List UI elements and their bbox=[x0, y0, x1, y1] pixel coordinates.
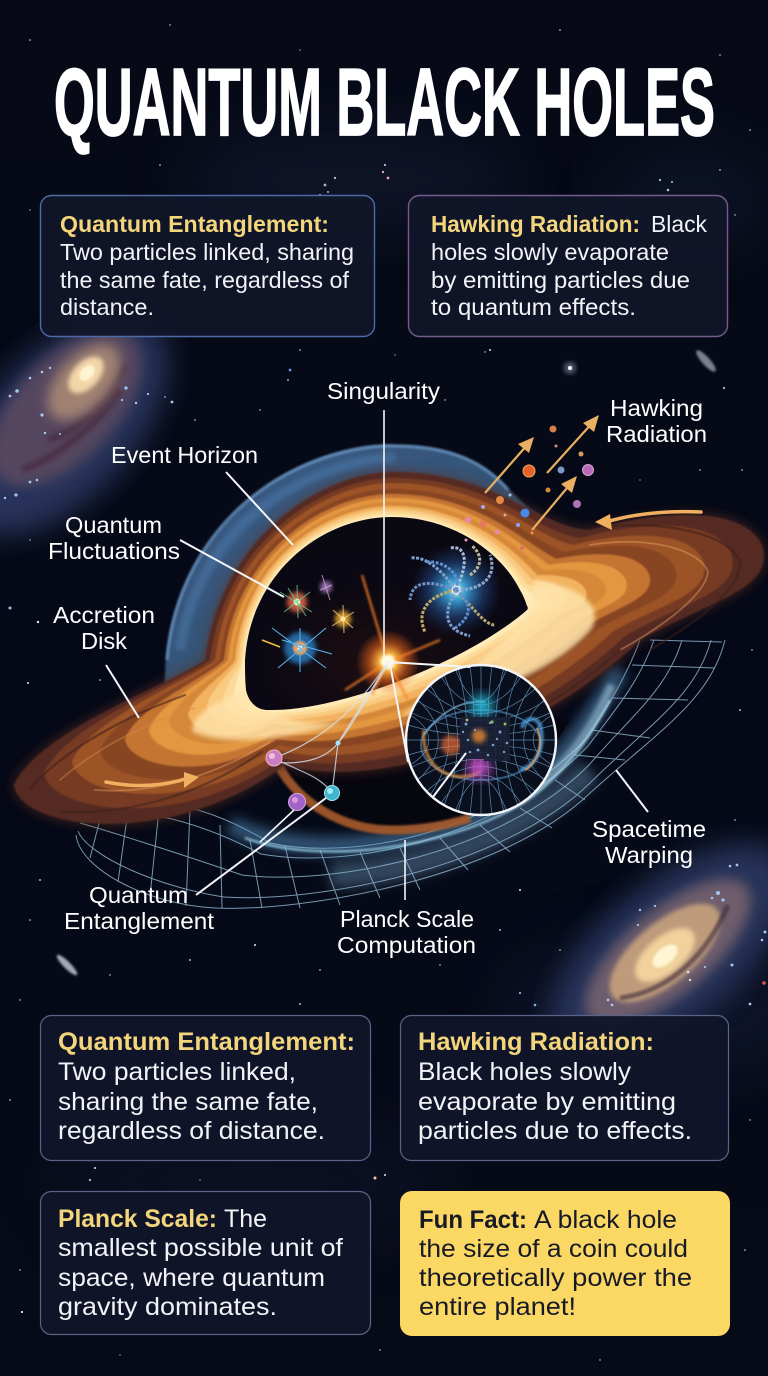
panel: Fun Fact: the size of a coin could bbox=[419, 1235, 688, 1263]
panel: Planck Scale bbox=[40, 1192, 370, 1334]
spiral inside the hole bbox=[410, 544, 502, 636]
spacetime warping grid bbox=[76, 640, 725, 908]
panel: Planck Scale: The bbox=[224, 1205, 267, 1233]
panel: Fun Fact bbox=[400, 1191, 730, 1336]
label: Quantum Fluctuations: Quantum bbox=[65, 512, 162, 538]
panel: bottom Hawking Radiation: evaporate by emitting bbox=[418, 1088, 676, 1116]
label: Event Horizon: Event Horizon bbox=[111, 442, 258, 468]
entangled particle: cyan bbox=[324, 786, 340, 800]
label: Accretion Disk: Accretion bbox=[53, 602, 155, 628]
concentric disk bands bbox=[14, 472, 764, 824]
panel: Fun Fact: theoretically power the bbox=[419, 1264, 692, 1292]
panel: Planck Scale: gravity dominates. bbox=[58, 1293, 277, 1321]
galaxy: bottom right bbox=[517, 805, 768, 1095]
entangled particle: small cyan bbox=[336, 740, 340, 746]
label: Spacetime Warping: Warping bbox=[605, 842, 693, 868]
black hole interior bbox=[245, 517, 528, 710]
quantum fluctuation bursts bbox=[262, 575, 354, 672]
Hawking radiation arrows bbox=[485, 415, 599, 530]
panel: bottom Quantum Entanglement: sharing the same fate, bbox=[58, 1088, 318, 1116]
label: Quantum Fluctuations bbox=[48, 512, 180, 564]
label: Hawking Radiation bbox=[606, 395, 707, 447]
panel: bottom Hawking Radiation: particles due to effects. bbox=[418, 1117, 692, 1145]
panel: bottom Hawking Radiation: Black holes slowly bbox=[418, 1058, 632, 1086]
panel: bottom Hawking Radiation: Hawking Radiation: bbox=[418, 1028, 654, 1056]
panel: bottom Quantum Entanglement bbox=[40, 1016, 370, 1160]
planck scale lens bbox=[406, 665, 556, 815]
panel: bottom Quantum Entanglement: regardless of distance. bbox=[58, 1117, 325, 1145]
label: Accretion Disk bbox=[53, 602, 155, 654]
incoming disk arrow bbox=[595, 512, 701, 530]
left disk arrow bbox=[106, 772, 199, 788]
bright cream glow: right bbox=[400, 580, 595, 716]
label: Planck Scale Computation: Planck Scale bbox=[340, 906, 474, 932]
label: Spacetime Warping: Spacetime bbox=[592, 816, 706, 842]
event horizon dome bbox=[160, 445, 600, 730]
Hawking radiation particles bbox=[464, 426, 594, 550]
panel: top Hawking Radiation: by emitting particles due bbox=[431, 267, 690, 293]
singularity core bbox=[345, 575, 440, 700]
bright star bbox=[564, 362, 576, 374]
panel: Planck Scale: Planck Scale: bbox=[58, 1205, 217, 1233]
panel: Fun Fact: entire planet! bbox=[419, 1293, 576, 1321]
panel: top Quantum Entanglement: Quantum Entanglement: bbox=[60, 211, 329, 237]
label: Planck Scale Computation: Computation bbox=[337, 932, 476, 958]
small galaxy: bottom left bbox=[55, 953, 79, 977]
leader lines bbox=[106, 410, 648, 900]
lower dark shadow of the hole bbox=[278, 720, 570, 830]
panel: Planck Scale: space, where quantum bbox=[58, 1264, 325, 1292]
panel: Fun Fact: A black hole bbox=[534, 1206, 677, 1234]
label: Quantum Entanglement bbox=[64, 882, 215, 934]
label: Hawking Radiation: Radiation bbox=[606, 421, 707, 447]
panel: bottom Quantum Entanglement: Quantum Entanglement: bbox=[58, 1028, 355, 1056]
panel: top Hawking Radiation: to quantum effects. bbox=[431, 294, 636, 320]
label: Singularity: Singularity bbox=[327, 378, 441, 404]
panel: Fun Fact: Fun Fact: bbox=[419, 1206, 527, 1234]
panel: top Quantum Entanglement: Two particles linked, sharing bbox=[60, 239, 354, 265]
accretion disk bbox=[14, 472, 764, 824]
small galaxy: top right bbox=[694, 348, 718, 374]
panel: top Hawking Radiation: holes slowly evaporate bbox=[431, 239, 669, 265]
label: Planck Scale Computation bbox=[337, 906, 476, 958]
label: Quantum Entanglement: Entanglement bbox=[64, 908, 215, 934]
disk outer haze bbox=[14, 472, 764, 824]
panel: top Quantum Entanglement: the same fate, regardless of bbox=[60, 267, 350, 293]
bright cream glow: left bbox=[193, 690, 345, 740]
label: Accretion Disk: Disk bbox=[81, 628, 127, 654]
label: Quantum Fluctuations: Fluctuations bbox=[48, 538, 180, 564]
label: Quantum Entanglement: Quantum bbox=[89, 882, 188, 908]
spacetime glow band bbox=[230, 670, 620, 875]
galaxy: top left bbox=[0, 277, 207, 573]
panel: top Quantum Entanglement: distance. bbox=[60, 294, 154, 320]
panel: bottom Hawking Radiation bbox=[400, 1016, 728, 1160]
label: Spacetime Warping bbox=[592, 816, 706, 868]
entangled particle: purple bbox=[288, 794, 306, 810]
panel: top Hawking Radiation bbox=[408, 196, 728, 336]
disk streaks bbox=[30, 525, 740, 812]
entanglement threads bbox=[274, 662, 388, 793]
panel: top Hawking Radiation: Hawking Radiation: bbox=[431, 211, 640, 237]
label: Hawking Radiation: Hawking bbox=[610, 395, 703, 421]
entangled particle: pink bbox=[266, 750, 282, 766]
panel: Planck Scale: smallest possible unit of bbox=[58, 1234, 343, 1262]
panel: bottom Quantum Entanglement: Two particles linked, bbox=[58, 1058, 296, 1086]
panel: top Quantum Entanglement bbox=[40, 196, 374, 336]
panel: top Hawking Radiation: Black bbox=[651, 211, 707, 237]
